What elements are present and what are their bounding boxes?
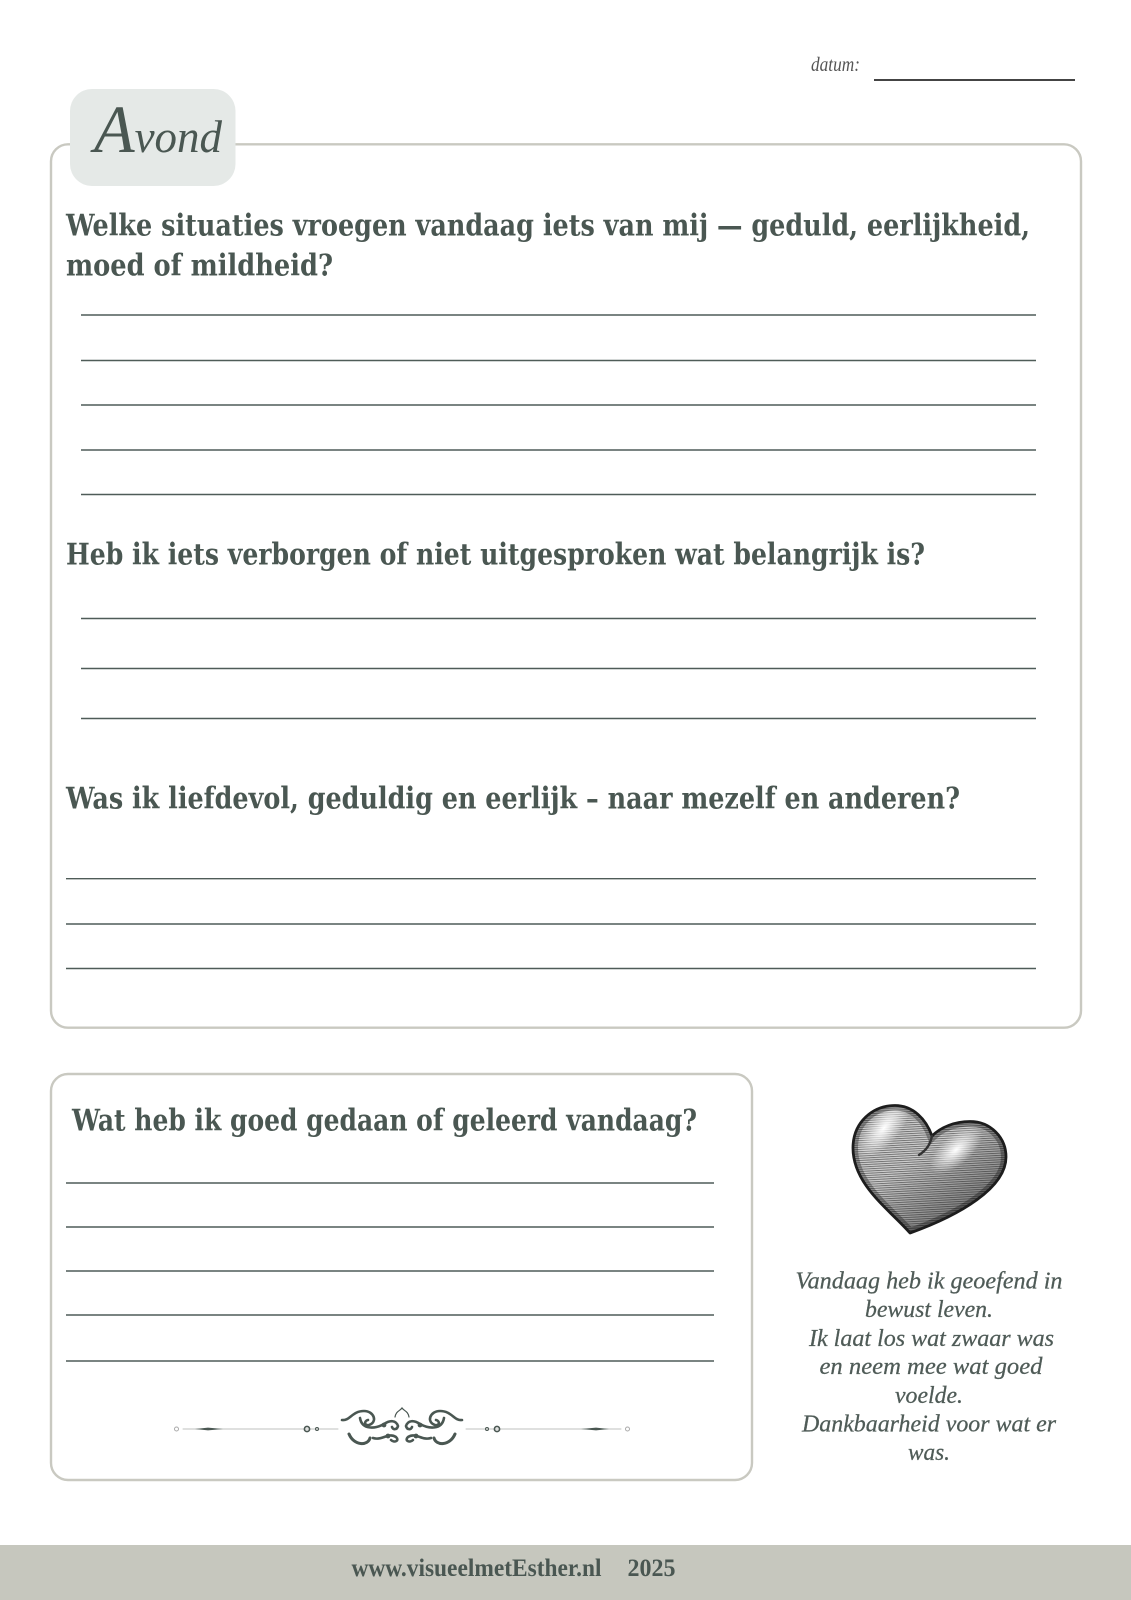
- date label: datum:: [811, 54, 860, 76]
- icon: engraved heart: [850, 1100, 1010, 1236]
- text block: closing reflection: Ik laat los wat zwaar was: [808, 1326, 1054, 1352]
- ornament divider: [174, 1408, 630, 1444]
- date write-in line: [874, 79, 1075, 81]
- writing lines: question 1: [81, 315, 1036, 494]
- text block: closing reflection: was.: [908, 1440, 950, 1466]
- footer website: www.visueelmetEsther.nl: [352, 1555, 602, 1582]
- tab: Avond: Avond: [90, 91, 223, 167]
- heading: question 4: Wat heb ik goed gedaan of geleerd vandaag?: [71, 1104, 697, 1138]
- text block: closing reflection: [796, 1268, 1062, 1466]
- panel: what went well: [51, 1074, 752, 1480]
- panel: evening questions: [51, 89, 1081, 1028]
- text block: closing reflection: bewust leven.: [865, 1297, 993, 1323]
- panel border: [51, 144, 1081, 1028]
- footer year: 2025: [628, 1555, 676, 1582]
- text block: closing reflection: Vandaag heb ik geoefend in: [796, 1268, 1062, 1294]
- tab: Avond: [70, 89, 236, 186]
- heading: question 3: Was ik liefdevol, geduldig en eerlijk – naar mezelf en anderen?: [65, 782, 960, 816]
- writing lines: question 3: [66, 879, 1036, 968]
- writing lines: question 4: [66, 1183, 714, 1361]
- text block: closing reflection: Dankbaarheid voor wat er: [801, 1412, 1057, 1438]
- heading: question 1: moed of mildheid?: [66, 248, 333, 284]
- footer band: [0, 1545, 1131, 1600]
- text block: closing reflection: voelde.: [895, 1383, 963, 1409]
- heading: question 2: Heb ik iets verborgen of niet uitgesproken wat belangrijk is?: [66, 538, 925, 572]
- heading: question 1: [65, 208, 1030, 284]
- text block: closing reflection: en neem mee wat goed: [820, 1354, 1044, 1380]
- panel border: [51, 1074, 752, 1480]
- writing lines: question 2: [81, 618, 1036, 718]
